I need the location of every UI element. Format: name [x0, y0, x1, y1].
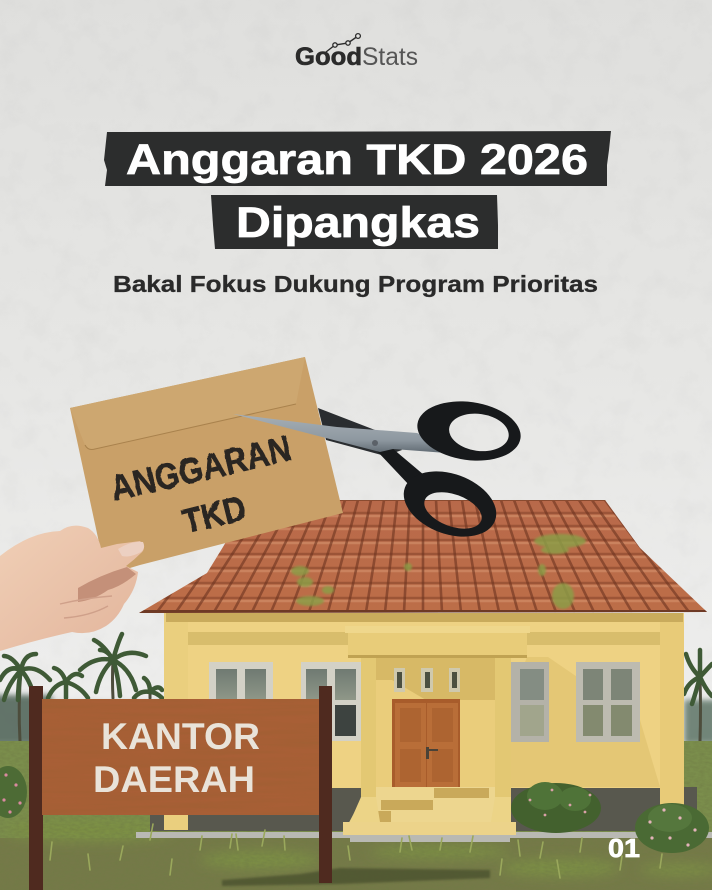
hand holding envelope — [0, 526, 144, 651]
envelope — [70, 357, 343, 575]
house — [136, 613, 712, 842]
sign board — [42, 699, 319, 815]
plinth — [150, 787, 697, 831]
window 4 — [576, 662, 640, 742]
bush centre right — [511, 782, 601, 833]
signboard: Kantor Daerah: KANTOR — [101, 716, 260, 757]
scissors — [233, 395, 525, 549]
subtitle: Bakal Fokus Dukung Program Prioritas — [113, 271, 598, 297]
background palm tree right — [684, 650, 712, 744]
envelope handwriting: ANGGARAN — [107, 427, 295, 509]
pillars — [350, 657, 511, 822]
sign left post — [29, 686, 43, 890]
left pilaster — [164, 613, 188, 830]
door — [392, 699, 460, 787]
moss on roof — [291, 534, 586, 609]
envelope flap — [70, 357, 305, 450]
title line 1 on torn tape: Anggaran TKD 2026 — [126, 136, 588, 184]
porch wall — [376, 657, 495, 787]
logo: GoodStats: Stats — [362, 43, 418, 71]
logo: GoodStats — [295, 34, 418, 71]
grass field — [0, 741, 712, 890]
envelope handwriting: TKD — [179, 488, 250, 542]
grass tufts — [50, 824, 662, 878]
lower handle — [395, 459, 505, 549]
steel blade — [233, 414, 460, 454]
signboard: Kantor Daerah — [29, 686, 332, 890]
background palm trees left — [0, 634, 170, 745]
lower arm — [376, 448, 424, 486]
portico — [345, 626, 530, 658]
title line 2 on torn tape — [211, 195, 498, 249]
wall — [166, 613, 683, 788]
upper handle — [413, 395, 525, 467]
scissors dark rear blade — [318, 408, 402, 456]
bush left — [0, 766, 27, 818]
sidewalk — [136, 832, 712, 842]
sign right post — [319, 686, 332, 883]
window 1 — [209, 662, 273, 700]
bush right — [635, 803, 709, 853]
window 3 — [485, 662, 549, 742]
page number: 01 — [608, 833, 640, 863]
logo: GoodStats: Good — [295, 43, 362, 71]
envelope handwriting — [107, 427, 295, 542]
ground shadow — [222, 868, 490, 886]
signboard: Kantor Daerah: DAERAH — [93, 759, 255, 800]
window 2 — [301, 662, 361, 741]
steps — [343, 787, 516, 835]
vents — [394, 668, 460, 692]
right pilaster — [660, 613, 684, 810]
tiled roof — [139, 500, 707, 613]
title line 2 on torn tape: Dipangkas — [236, 199, 480, 247]
